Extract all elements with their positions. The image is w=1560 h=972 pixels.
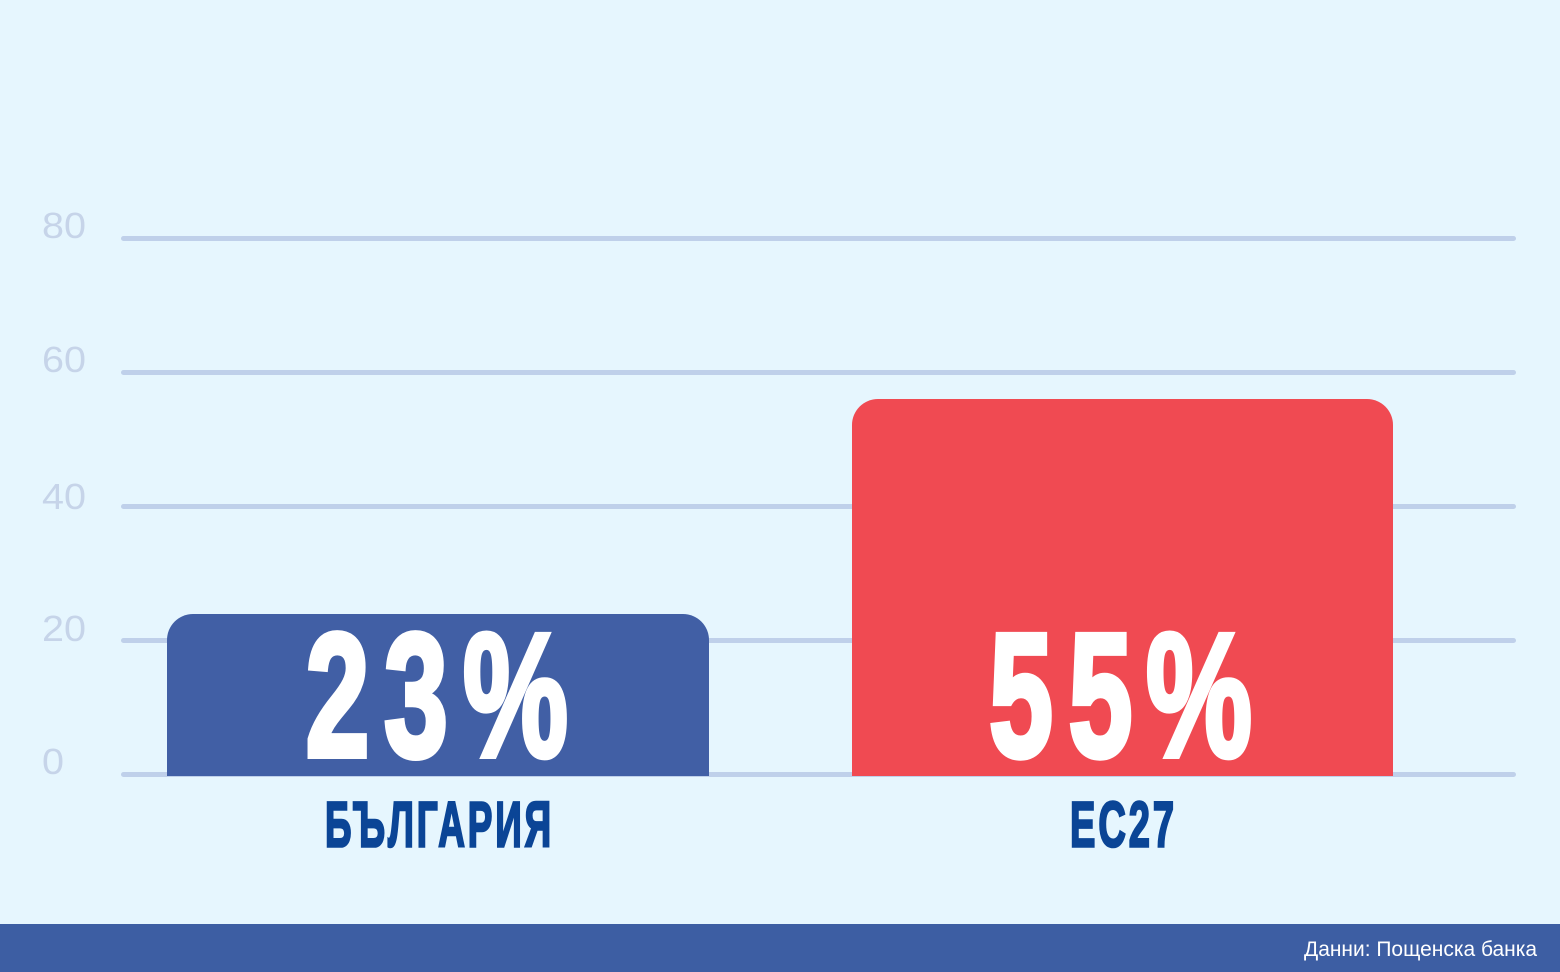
bar: ЕС27 55%: 5 — [1068, 598, 1132, 794]
y axis labels: 60 — [42, 339, 86, 380]
bar: България 23%: 2 — [306, 598, 370, 794]
source text: Данни: Пощенска банка — [1304, 938, 1537, 961]
bar: ЕС27 55% — [852, 399, 1393, 794]
bar: ЕС27 55%: 5 — [989, 598, 1053, 794]
y axis labels: 20 — [42, 608, 86, 649]
category label: България: БЪЛГАРИЯ — [325, 788, 554, 860]
bar chart — [42, 205, 1516, 860]
bar: ЕС27 55%: % — [1146, 598, 1252, 794]
category label: ЕС27: ЕС27 — [1070, 788, 1177, 860]
bar: България 23%: 3 — [384, 598, 448, 794]
y axis labels: 80 — [42, 205, 86, 246]
y axis labels: 40 — [42, 476, 86, 517]
y axis labels: 0 — [42, 741, 64, 782]
bar: България 23%: % — [463, 598, 568, 794]
footer bar — [0, 924, 1560, 972]
y axis labels — [42, 205, 86, 782]
grid lines — [121, 236, 1516, 777]
bar: България 23% — [167, 598, 709, 794]
